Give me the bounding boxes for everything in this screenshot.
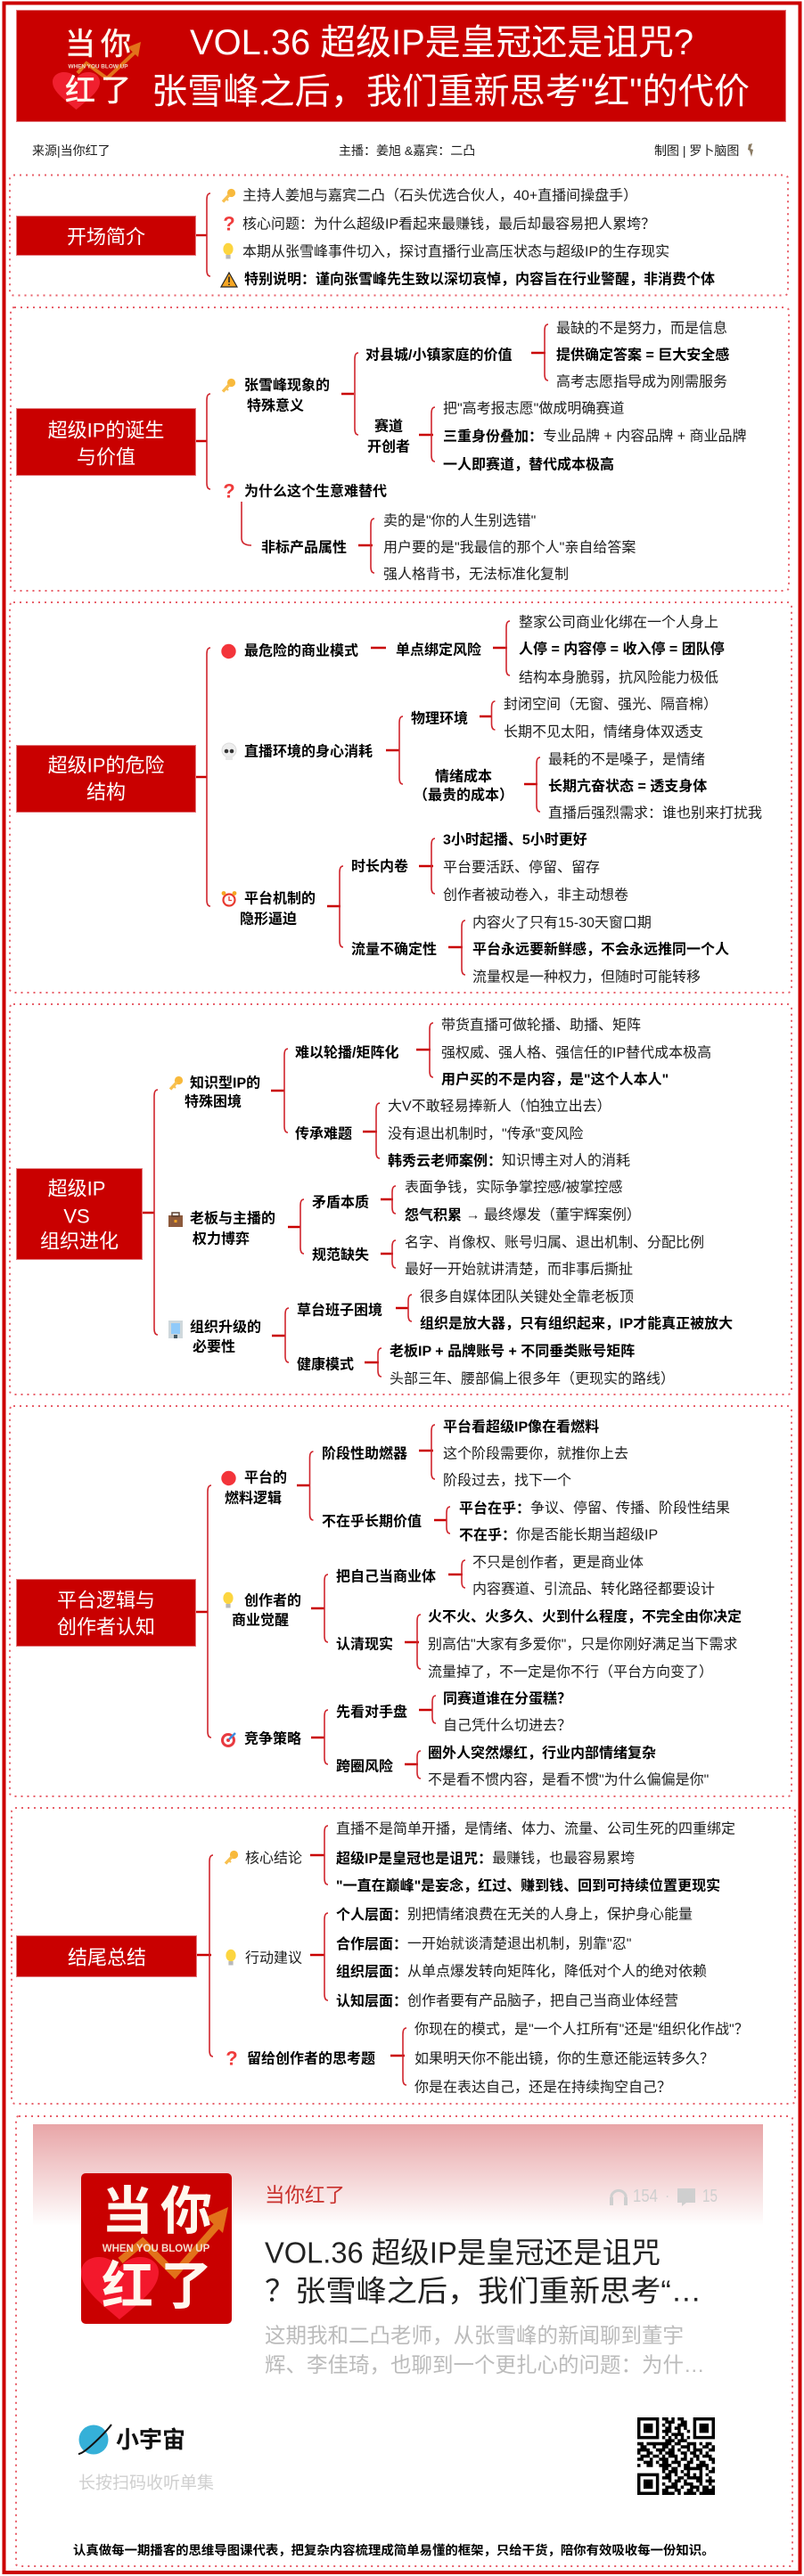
icon: red circle	[221, 1471, 236, 1485]
play and comment stats: 15	[702, 2187, 718, 2206]
header logo: 红	[65, 74, 95, 108]
branch: 平台的燃料逻辑: 阶段过去，找下一个	[443, 1472, 571, 1488]
branch: 竞争策略: 先看对手盘	[336, 1704, 407, 1720]
branch: 难替代: 非标产品属性	[261, 538, 347, 556]
header logo	[53, 28, 141, 110]
branch: 平台机制的隐形逼迫: 流量不确定性	[351, 941, 437, 957]
panel: 超级IP的危险结构	[10, 602, 792, 993]
heading: 开场简介	[16, 216, 196, 255]
branch: 老板与主播: 权力博弈	[193, 1230, 250, 1247]
panel: 平台逻辑与创作者认知	[10, 1406, 792, 1796]
heading: 超级IP vs 组织进化: 组织进化	[40, 1230, 119, 1253]
icon: question: ?	[226, 2048, 238, 2069]
header logo: 你	[101, 28, 131, 61]
branch: 组织升级: 草台班子困境	[297, 1301, 382, 1319]
branch: 老板与主播	[168, 1180, 704, 1278]
branch: 平台的燃料逻辑: 燃料逻辑	[225, 1490, 282, 1506]
credits row: 制图 | 罗卜脑图	[654, 143, 739, 158]
branch: 张雪峰现象: 最缺的不是努力，而是信息	[556, 321, 727, 337]
icon: bulb	[226, 1950, 236, 1966]
podcast name: 当你红了	[265, 2185, 345, 2206]
heading: 超级IP的危险结构	[16, 745, 196, 813]
intro line 3: 本期从张雪峰事件切入，探讨直播行业高压状态与超级IP的生存现实	[242, 244, 669, 260]
heading: 超级IP的诞生与价值: 超级IP的诞生	[48, 419, 164, 442]
header banner	[16, 11, 786, 121]
branch: 老板与主播: 规范缺失	[312, 1247, 369, 1263]
branch: 知识型IP: 带货直播可做轮播、助播、矩阵	[441, 1018, 641, 1034]
intro line 1: 主持人姜旭与嘉宾二凸（石头优选合伙人，40+直播间操盘手）	[242, 187, 637, 203]
branch: 行动建议: 组织层面：从单点爆发转向矩阵化，降低对个人的绝对依赖	[336, 1962, 707, 1980]
icon: bulb	[223, 243, 234, 258]
branch: 张雪峰现象: 提供确定答案 = 巨大安全感	[556, 346, 729, 364]
episode description	[265, 2324, 704, 2376]
xiaoyuzhou logo	[78, 2425, 185, 2454]
branch: 思考题	[226, 2021, 749, 2096]
panel: 开场简介	[10, 175, 788, 296]
heading: 结尾总结	[16, 1935, 196, 1976]
scan hint: 长按扫码收听单集	[78, 2474, 214, 2493]
branch: 核心结论: 核心结论	[245, 1850, 302, 1866]
branch: 思考题: 你现在的模式，是"一个人扛所有"还是"组织化作战"？	[414, 2021, 749, 2037]
branch: 组织升级: 组织是放大器，只有组织起来，IP才能真正被放大	[420, 1315, 733, 1331]
branch: 直播环境的身心消耗: 长期不见太阳，情绪身体双透支	[504, 724, 703, 740]
branch: 创作者的商业觉醒	[223, 1554, 742, 1681]
header logo: 当	[65, 28, 95, 61]
icon: skull	[222, 743, 236, 760]
QR code	[637, 2419, 715, 2493]
branch: 直播环境的身心消耗: 情绪成本	[435, 768, 492, 784]
intro line 4: 特别说明：谨向张雪峰先生致以深切哀悼，内容旨在行业警醒，非消费个体	[244, 271, 715, 287]
branch: 平台机制的隐形逼迫: 流量权是一种权力，但随时可能转移	[472, 969, 701, 985]
branch: 创作者的商业觉醒: 商业觉醒	[232, 1613, 289, 1629]
header logo: WHEN YOU BLOW UP	[69, 64, 128, 70]
branch: 张雪峰现象: 特殊意义	[247, 397, 304, 413]
credits row: 来源|当你红了	[32, 143, 111, 158]
branch: 思考题: 留给创作者的思考题	[247, 2049, 375, 2067]
branch: 创作者的商业觉醒: 火不火、火多久、火到什么程度，不完全由你决定	[428, 1607, 742, 1625]
icon: bulb	[223, 1592, 234, 1607]
branch: 创作者的商业觉醒: 流量掉了，不一定是你不行（平台方向变了）	[428, 1664, 713, 1681]
branch: 最危险的商业模式: 人停 = 内容停 = 收入停 = 团队停	[519, 640, 725, 658]
xiaoyuzhou logo: 小宇宙	[116, 2426, 185, 2453]
header logo: 了	[101, 74, 131, 108]
icon: key	[223, 189, 235, 201]
branch: 张雪峰现象: 赛道	[374, 417, 403, 435]
heading: 超级IP的危险结构: 结构	[86, 781, 126, 804]
branch: 知识型IP: 强权威、强人格、强信任的IP替代成本极高	[441, 1044, 711, 1060]
branch: 平台的燃料逻辑: 不在乎：你是否能长期当超级IP	[459, 1525, 658, 1543]
heading: 超级IP vs 组织进化: 超级IP	[48, 1178, 105, 1199]
branch: 平台的燃料逻辑: 不在乎长期价值	[322, 1513, 422, 1529]
card gradient header	[33, 2124, 763, 2226]
branch: 张雪峰现象: 一人即赛道，替代成本极高	[443, 456, 614, 472]
heading: 开场简介: 开场简介	[67, 226, 145, 248]
branch: 最危险的商业模式: 结构本身脆弱，抗风险能力极低	[519, 670, 718, 686]
branch: 核心结论	[226, 1821, 735, 1894]
podcast cover logo: 你	[160, 2183, 212, 2240]
branch: 张雪峰现象	[223, 321, 747, 472]
episode title: ？张雪峰之后，我们重新思考“…	[265, 2274, 701, 2308]
branch: 组织升级	[168, 1288, 733, 1386]
branch: 竞争策略: 同赛道谁在分蛋糕？	[443, 1689, 571, 1707]
branch: 竞争策略	[223, 1689, 709, 1787]
branch: 组织升级: 头部三年、腰部偏上很多年（更现实的路线）	[390, 1370, 675, 1386]
branch: 老板与主播: 表面争钱，实际争掌控感/被掌控感	[405, 1180, 622, 1196]
branch: 竞争策略: 不是看不惯内容，是看不惯"为什么偏偏是你"	[428, 1771, 709, 1787]
branch: 创作者的商业觉醒: 不只是创作者，更是商业体	[472, 1554, 644, 1570]
episode description: 辉、李佳琦，也聊到一个更扎心的问题：为什…	[265, 2353, 704, 2376]
heading: 超级IP的诞生与价值: 与价值	[77, 446, 135, 469]
branch: 平台的燃料逻辑: 平台在乎：争议、停留、传播、阶段性结果	[459, 1499, 730, 1517]
heading: 超级IP vs 组织进化: VS	[63, 1205, 90, 1228]
heading: 超级IP的诞生与价值	[16, 408, 196, 476]
branch: 难替代: 强人格背书，无法标准化复制	[383, 567, 569, 583]
podcast cover logo: 红	[102, 2258, 153, 2315]
branch: 组织升级: 必要性	[193, 1338, 235, 1354]
branch: 知识型IP: 韩秀云老师案例：知识博主对人的消耗	[388, 1151, 630, 1169]
icon: key	[223, 379, 235, 392]
branch: 行动建议: 认知层面：创作者要有产品脑子，把自己当商业体经营	[336, 1992, 678, 2008]
icon: key	[226, 1851, 238, 1864]
footer slogan: 认真做每一期播客的思维导图课代表，把复杂内容梳理成简单易懂的框架，只给干货，陪你有效吸收每一份知识。	[73, 2542, 715, 2558]
branch: 难替代	[223, 479, 636, 583]
branch: 老板与主播: 怨气积累 → 最终爆发（董宇辉案例）	[405, 1206, 641, 1223]
branch: 最危险的商业模式: 单点绑定风险	[396, 642, 481, 658]
intro line 2: 核心问题：为什么超级IP看起来最赚钱，最后却最容易把人累垮？	[242, 216, 655, 232]
branch: 老板与主播: 矛盾本质	[312, 1194, 369, 1210]
branch: 竞争策略: 圈外人突然爆红，行业内部情绪复杂	[428, 1745, 656, 1761]
icon: key	[170, 1076, 183, 1089]
branch: 平台机制的隐形逼迫: 内容火了只有15-30天窗口期	[472, 914, 652, 930]
branch: 平台机制的隐形逼迫: 平台要活跃、停留、留存	[443, 859, 600, 875]
branch: 老板与主播: 老板与主播的	[190, 1210, 275, 1226]
branch: 创作者的商业觉醒: 认清现实	[336, 1636, 393, 1652]
credits row	[32, 143, 753, 158]
play and comment stats: 154	[633, 2187, 658, 2206]
branch: 创作者的商业觉醒: 别高估"大家有多爱你"，只是你刚好满足当下需求	[428, 1636, 737, 1652]
branch: 平台机制的隐形逼迫: 隐形逼迫	[240, 911, 297, 927]
branch: 难替代: 用户要的是"我最信的那个人"亲自给答案	[383, 540, 636, 556]
branch: 平台机制的隐形逼迫	[222, 832, 729, 985]
icon: office building	[168, 1321, 183, 1338]
branch: 平台的燃料逻辑	[221, 1419, 730, 1543]
branch: 行动建议: 个人层面：别把情绪浪费在无关的人身上，保护身心能量	[336, 1907, 693, 1923]
panel: 结尾总结	[12, 1808, 795, 2104]
branch: 最危险的商业模式	[221, 615, 725, 686]
branch: 直播环境的身心消耗: 封闭空间（无窗、强光、隔音棉）	[504, 697, 718, 713]
icon: target	[223, 1733, 235, 1746]
branch: 平台机制的隐形逼迫: 平台永远要新鲜感，不会永远推同一个人	[472, 941, 729, 957]
branch: 核心结论: 超级IP是皇冠也是诅咒：最赚钱，也最容易累垮	[336, 1850, 635, 1866]
podcast cover logo: 了	[160, 2258, 212, 2315]
branch: 难替代: 为什么这个生意难替代	[244, 483, 387, 499]
branch: 组织升级: 老板IP + 品牌账号 + 不同垂类账号矩阵	[390, 1342, 635, 1360]
branch: 平台的燃料逻辑: 平台看超级IP像在看燃料	[443, 1419, 599, 1435]
panel: 超级IP vs 组织进化	[10, 1004, 792, 1394]
title line 2: 张雪峰之后，我们重新思考"红"的代价	[152, 72, 750, 111]
branch: 竞争策略: 竞争策略	[244, 1730, 301, 1746]
icon: question: ?	[223, 479, 235, 503]
panel: podcast card	[16, 2116, 792, 2566]
podcast cover logo	[81, 2173, 232, 2324]
branch: 平台的燃料逻辑: 阶段性助燃器	[322, 1445, 407, 1461]
branch: 行动建议: 合作层面：一开始就谈清楚退出机制，别靠"忍"	[336, 1935, 631, 1951]
branch: 知识型IP: 没有退出机制时，"传承"变风险	[388, 1126, 583, 1142]
branch: 知识型IP: 大V不敢轻易捧新人（怕独立出去）	[388, 1098, 611, 1114]
branch: 平台机制的隐形逼迫: 创作者被动卷入，非主动想卷	[443, 887, 628, 904]
branch: 知识型IP	[170, 1018, 711, 1169]
branch: 直播环境的身心消耗: 长期亢奋状态 = 透支身体	[548, 777, 707, 795]
branch: 最危险的商业模式: 最危险的商业模式	[244, 642, 358, 659]
heading: 结尾总结: 结尾总结	[68, 1946, 146, 1969]
play and comment stats	[610, 2187, 718, 2206]
episode title	[265, 2237, 701, 2308]
branch: 知识型IP: 知识型IP的	[190, 1075, 260, 1091]
branch: 直播环境的身心消耗: 物理环境	[411, 709, 468, 727]
branch: 老板与主播: 最好一开始就讲清楚，而非事后撕扯	[405, 1262, 633, 1278]
branch: 张雪峰现象: 对县城/小镇家庭的价值	[365, 346, 512, 364]
credits row: 主播：姜旭 &嘉宾：二凸	[339, 143, 475, 158]
branch: 张雪峰现象: 高考志愿指导成为刚需服务	[556, 374, 727, 390]
branch: 核心结论: "一直在巅峰"是妄念，红过、赚到钱、回到可持续位置更现实	[336, 1877, 720, 1894]
panel: 超级IP的诞生与价值	[11, 307, 789, 591]
branch: 平台机制的隐形逼迫: 3小时起播、5小时更好	[443, 832, 587, 848]
branch: 张雪峰现象: 三重身份叠加：专业品牌 + 内容品牌 + 商业品牌	[443, 428, 747, 444]
branch: 竞争策略: 自己凭什么切进去？	[443, 1718, 571, 1734]
heading: 平台逻辑与创作者认知: 创作者认知	[57, 1616, 155, 1638]
branch: 直播环境的身心消耗: 直播后强烈需求：谁也别来打扰我	[548, 806, 762, 822]
play and comment stats: ·	[665, 2188, 669, 2204]
heading: 超级IP vs 组织进化	[16, 1169, 143, 1260]
branch: 组织升级: 很多自媒体团队关键处全靠老板顶	[420, 1288, 634, 1304]
branch: 创作者的商业觉醒: 把自己当商业体	[336, 1568, 436, 1584]
branch: 创作者的商业觉醒: 创作者的	[244, 1593, 301, 1609]
branch: 难替代: 卖的是"你的人生别选错"	[383, 513, 536, 529]
branch: 直播环境的身心消耗: （最贵的成本）	[414, 786, 513, 804]
icon: alarm clock	[222, 891, 236, 905]
branch: 直播环境的身心消耗: 直播环境的身心消耗	[244, 743, 373, 759]
branch: 思考题: 如果明天你不能出镜，你的生意还能运转多久？	[414, 2049, 714, 2067]
branch: 竞争策略: 跨圈风险	[336, 1757, 393, 1775]
branch: 直播环境的身心消耗: 最耗的不是嗓子，是情绪	[548, 752, 705, 768]
branch: 平台的燃料逻辑: 平台的	[244, 1468, 287, 1486]
episode title: VOL.36 超级IP是皇冠还是诅咒	[265, 2237, 660, 2269]
icon: question: ?	[223, 212, 235, 235]
branch: 创作者的商业觉醒: 内容赛道、引流品、转化路径都要设计	[472, 1581, 715, 1597]
branch: 思考题: 你是在表达自己，还是在持续掏空自己？	[414, 2080, 671, 2096]
podcast cover logo: WHEN YOU BLOW UP	[103, 2244, 210, 2254]
heading: 超级IP的危险结构: 超级IP的危险	[48, 754, 164, 777]
branch: 张雪峰现象: 开创者	[367, 438, 410, 454]
branch: 平台的燃料逻辑: 这个阶段需要你，就推你上去	[443, 1445, 628, 1461]
branch: 知识型IP: 特殊困境	[185, 1092, 242, 1110]
branch: 老板与主播: 名字、肖像权、账号归属、退出机制、分配比例	[405, 1235, 704, 1251]
branch: 组织升级: 组织升级的	[190, 1319, 261, 1335]
branch: 直播环境的身心消耗	[222, 697, 762, 822]
branch: 知识型IP: 难以轮播/矩阵化	[295, 1044, 398, 1060]
branch: 张雪峰现象: 张雪峰现象的	[244, 376, 330, 394]
branch: 平台机制的隐形逼迫: 平台机制的	[244, 889, 316, 907]
episode description: 这期我和二凸老师，从张雪峰的新闻聊到董宇	[265, 2324, 684, 2347]
podcast cover logo: 当	[102, 2183, 153, 2240]
branch: 知识型IP: 用户买的不是内容，是"这个人本人"	[441, 1071, 669, 1087]
heading: 平台逻辑与创作者认知: 平台逻辑与	[57, 1590, 155, 1611]
branch: 平台机制的隐形逼迫: 时长内卷	[351, 857, 408, 875]
branch: 张雪峰现象: 把"高考报志愿"做成明确赛道	[443, 399, 624, 417]
branch: 知识型IP: 传承难题	[295, 1126, 352, 1142]
branch: 行动建议	[226, 1907, 707, 2008]
icon: briefcase	[168, 1213, 183, 1227]
heading: 平台逻辑与创作者认知	[16, 1579, 196, 1647]
branch: 组织升级: 健康模式	[297, 1356, 354, 1372]
branch: 行动建议: 行动建议	[245, 1950, 302, 1966]
branch: 核心结论: 直播不是简单开播，是情绪、体力、流量、公司生死的四重绑定	[336, 1821, 735, 1837]
icon: warning	[221, 273, 237, 287]
title line 1: VOL.36 超级IP是皇冠还是诅咒?	[190, 23, 693, 62]
icon: red circle	[221, 644, 236, 658]
branch: 最危险的商业模式: 整家公司商业化绑在一个人身上	[519, 615, 718, 631]
